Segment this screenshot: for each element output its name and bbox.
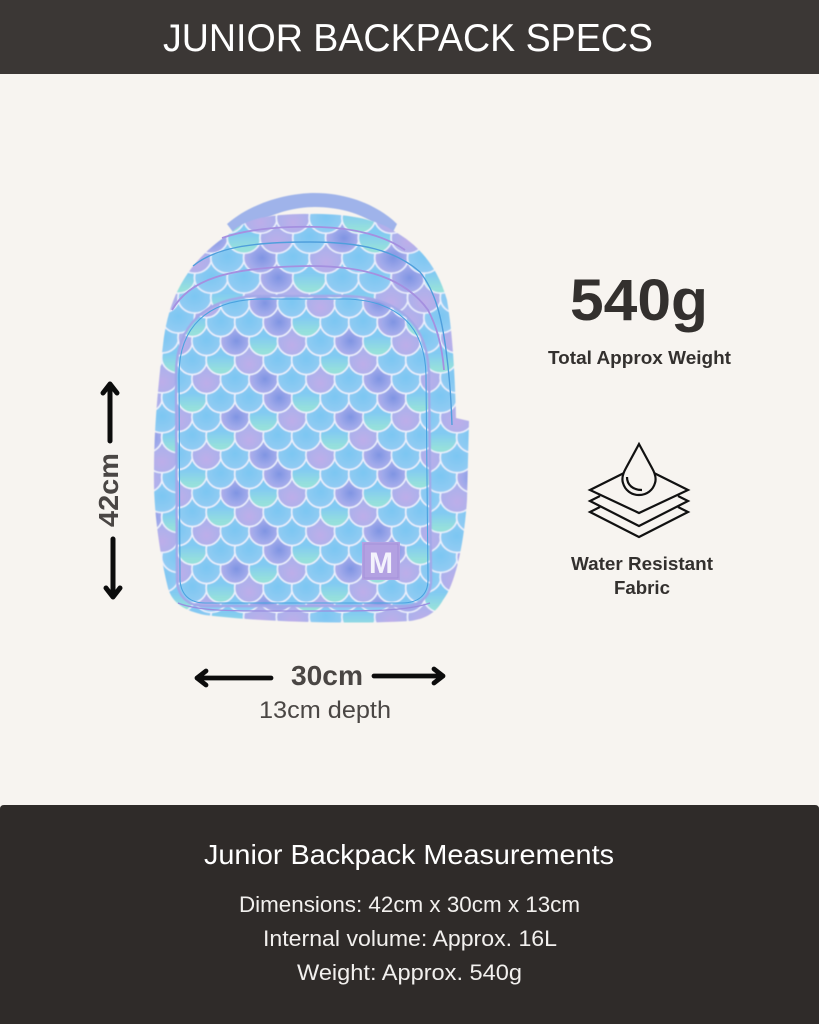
width measurement (197, 660, 443, 724)
dimensions line: Dimensions: 42cm x 30cm x 13cm (239, 892, 580, 917)
base seam (178, 603, 430, 611)
weight line: Weight: Approx. 540g (297, 960, 522, 985)
arrow left (197, 671, 271, 685)
arrow down (106, 539, 120, 597)
panel heading: Junior Backpack Measurements (204, 839, 614, 870)
icon: water drop on fabric layers (590, 444, 688, 537)
water resistant label (571, 554, 713, 598)
zip line: third compartment (172, 266, 444, 370)
measurements panel (0, 805, 819, 1024)
logo letter: M (369, 547, 393, 580)
arrow up (103, 384, 117, 441)
volume line: Internal volume: Approx. 16L (263, 926, 557, 951)
panel piping (179, 299, 428, 603)
weight callout (548, 268, 731, 368)
depth label: 13cm depth (259, 697, 391, 724)
logo patch (362, 542, 400, 580)
height measurement (93, 384, 124, 597)
header banner (0, 0, 819, 74)
title: JUNIOR BACKPACK SPECS (163, 17, 653, 60)
arrow right (374, 669, 443, 683)
water resistant label: Fabric (614, 578, 670, 598)
backpack illustration (154, 193, 469, 623)
zip line: upper compartment (222, 227, 405, 250)
backpack body (154, 214, 469, 623)
weight value: 540g (570, 268, 708, 333)
zip line: second compartment (193, 242, 452, 425)
front panel (176, 296, 431, 606)
width label: 30cm (291, 660, 363, 691)
height label: 42cm (93, 453, 124, 527)
water resistant label: Water Resistant (571, 554, 713, 574)
weight label: Total Approx Weight (548, 348, 731, 368)
handle (227, 193, 397, 236)
